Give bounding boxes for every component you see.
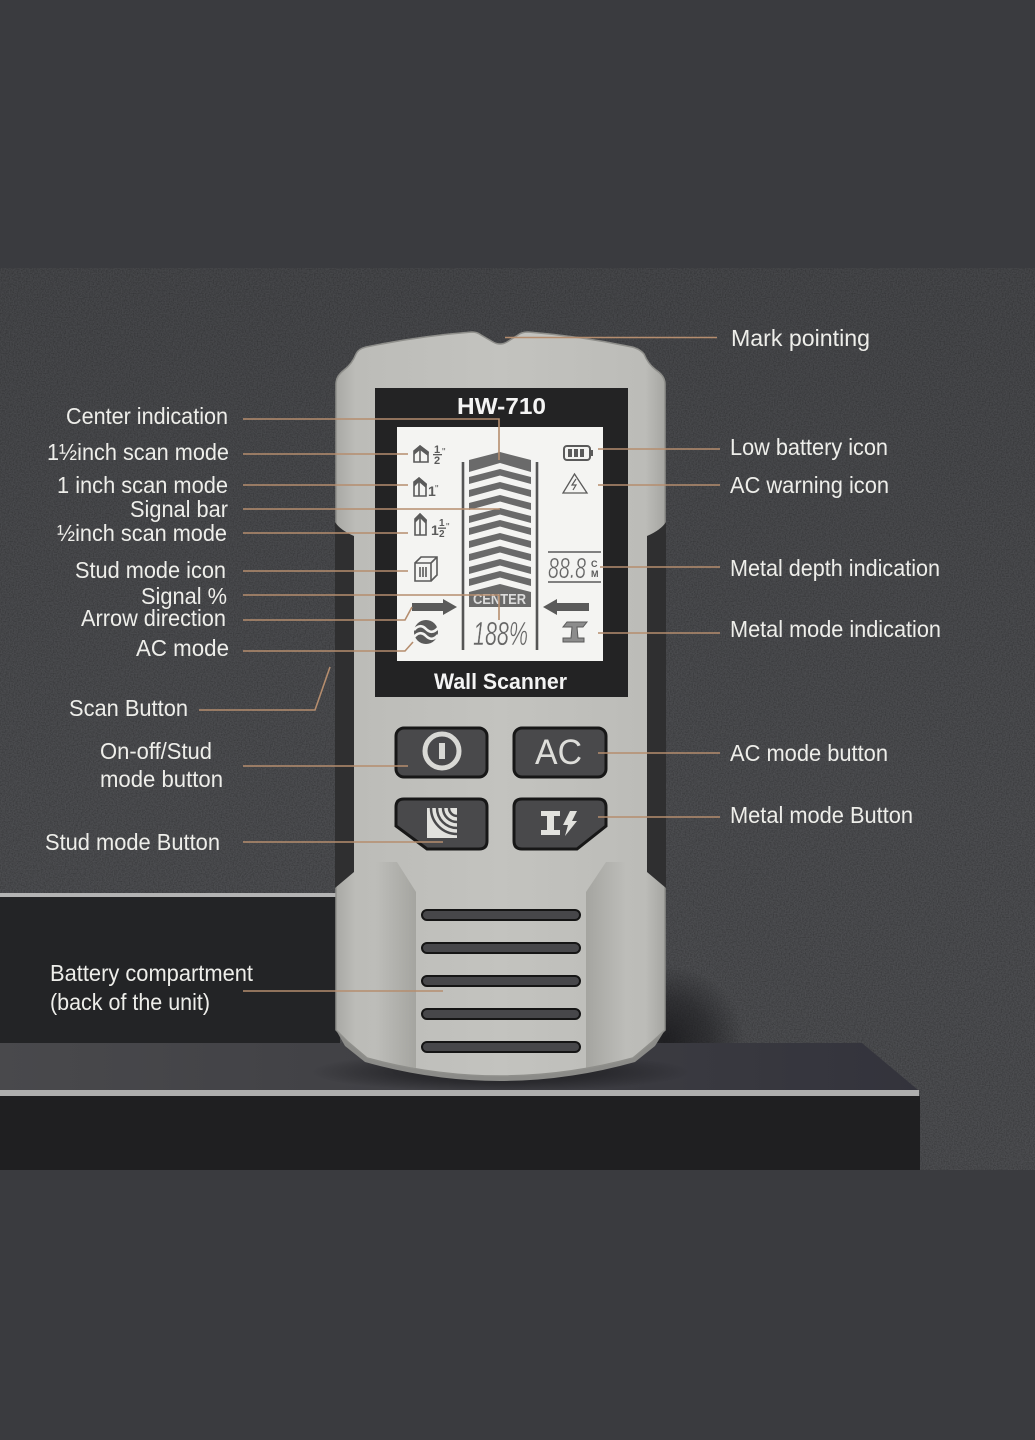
- label: battery compartment: Battery compartment: [50, 960, 253, 986]
- label: stud mode button: Stud mode Button: [45, 829, 220, 855]
- button: metal mode: [514, 799, 606, 849]
- icon: one inch scan: [414, 477, 439, 499]
- label: AC mode: AC mode: [136, 635, 229, 661]
- metal depth readout: 88.8: [548, 553, 586, 585]
- labels: left column: [45, 403, 253, 1015]
- display bezel: [375, 388, 628, 697]
- label: center indication: Center indication: [66, 403, 228, 429]
- label: metal mode button: Metal mode Button: [730, 802, 913, 828]
- LCD side rails: [463, 462, 537, 650]
- icon: one and a half inch scan: 2: [439, 529, 445, 540]
- leader lines: [199, 338, 720, 991]
- upper shelf on left: [0, 893, 340, 1043]
- label: arrow direction: Arrow direction: [81, 605, 226, 631]
- icon: I-beam: [563, 622, 587, 642]
- lower shelf: [0, 1043, 920, 1170]
- label: battery compartment: (back of the unit): [50, 989, 210, 1015]
- right grip: [647, 522, 666, 888]
- button: AC: AC: [535, 733, 582, 772]
- icon: half inch scan: [414, 444, 446, 467]
- labels: right column: [730, 325, 941, 828]
- icon: AC wave: [414, 620, 438, 644]
- metal depth readout: C: [591, 559, 598, 569]
- label: AC mode button: AC mode button: [730, 740, 888, 766]
- icon: half inch scan: ": [442, 447, 446, 458]
- label: 1 inch scan mode: 1 inch scan mode: [57, 472, 228, 498]
- metal depth readout: M: [591, 569, 598, 579]
- label: scan button: Scan Button: [69, 695, 188, 721]
- icon: one and a half inch scan: 1: [439, 518, 445, 529]
- lower left side strip: [376, 862, 416, 1068]
- label: stud mode icon: Stud mode icon: [75, 557, 226, 583]
- label: metal depth indication: Metal depth indication: [730, 555, 940, 581]
- icon: one inch scan: ": [435, 484, 439, 495]
- scanner device: [335, 332, 666, 1081]
- icon: stud box: [415, 557, 437, 581]
- signal percentage readout: 188%: [473, 615, 528, 652]
- label: low battery icon: Low battery icon: [730, 434, 888, 460]
- device body: [336, 332, 665, 1076]
- signal bar chevrons: [469, 452, 531, 607]
- lower right side strip: [586, 862, 626, 1068]
- button: stud mode: [394, 798, 488, 850]
- label: 1½ inch scan mode: 1½inch scan mode: [47, 439, 229, 465]
- icon: half inch scan: 1: [434, 444, 440, 456]
- icon: left arrow: [543, 599, 589, 615]
- device bottom lip: [336, 1030, 665, 1081]
- icon: AC warning triangle: [563, 474, 587, 493]
- textured wall band: [0, 268, 1035, 1170]
- label: on-off stud button: [100, 738, 223, 792]
- label: signal bar: Signal bar: [130, 496, 228, 522]
- label: mark pointing: Mark pointing: [731, 325, 870, 351]
- label: on-off stud button: mode button: [100, 766, 223, 792]
- label: battery compartment: [50, 960, 253, 1015]
- icon: battery: [564, 446, 593, 460]
- LCD panel: [397, 427, 603, 661]
- device shadow on wall: [585, 965, 745, 1115]
- label: AC warning icon: AC warning icon: [730, 472, 889, 498]
- icon: one and a half inch scan: [415, 513, 450, 540]
- label: metal mode indication: Metal mode indication: [730, 616, 941, 642]
- button: on-off / stud: [396, 728, 487, 777]
- center label: CENTER: [473, 591, 526, 608]
- label: ½ inch scan mode: ½inch scan mode: [57, 520, 227, 546]
- icon: half inch scan: 2: [434, 455, 440, 467]
- label: on-off stud button: On-off/Stud: [100, 738, 212, 764]
- label: signal percent: Signal %: [141, 583, 227, 609]
- icon: one and a half inch scan: ": [446, 522, 450, 533]
- left grip: [335, 522, 354, 888]
- button: AC: [514, 728, 606, 777]
- icon: one inch scan: 1: [428, 483, 436, 499]
- icon: one and a half inch scan: 1: [431, 522, 439, 538]
- model name: HW-710: [457, 393, 546, 419]
- product name: Wall Scanner: [434, 669, 567, 694]
- icon: right arrow: [412, 599, 457, 615]
- battery compartment slots: [422, 910, 580, 1052]
